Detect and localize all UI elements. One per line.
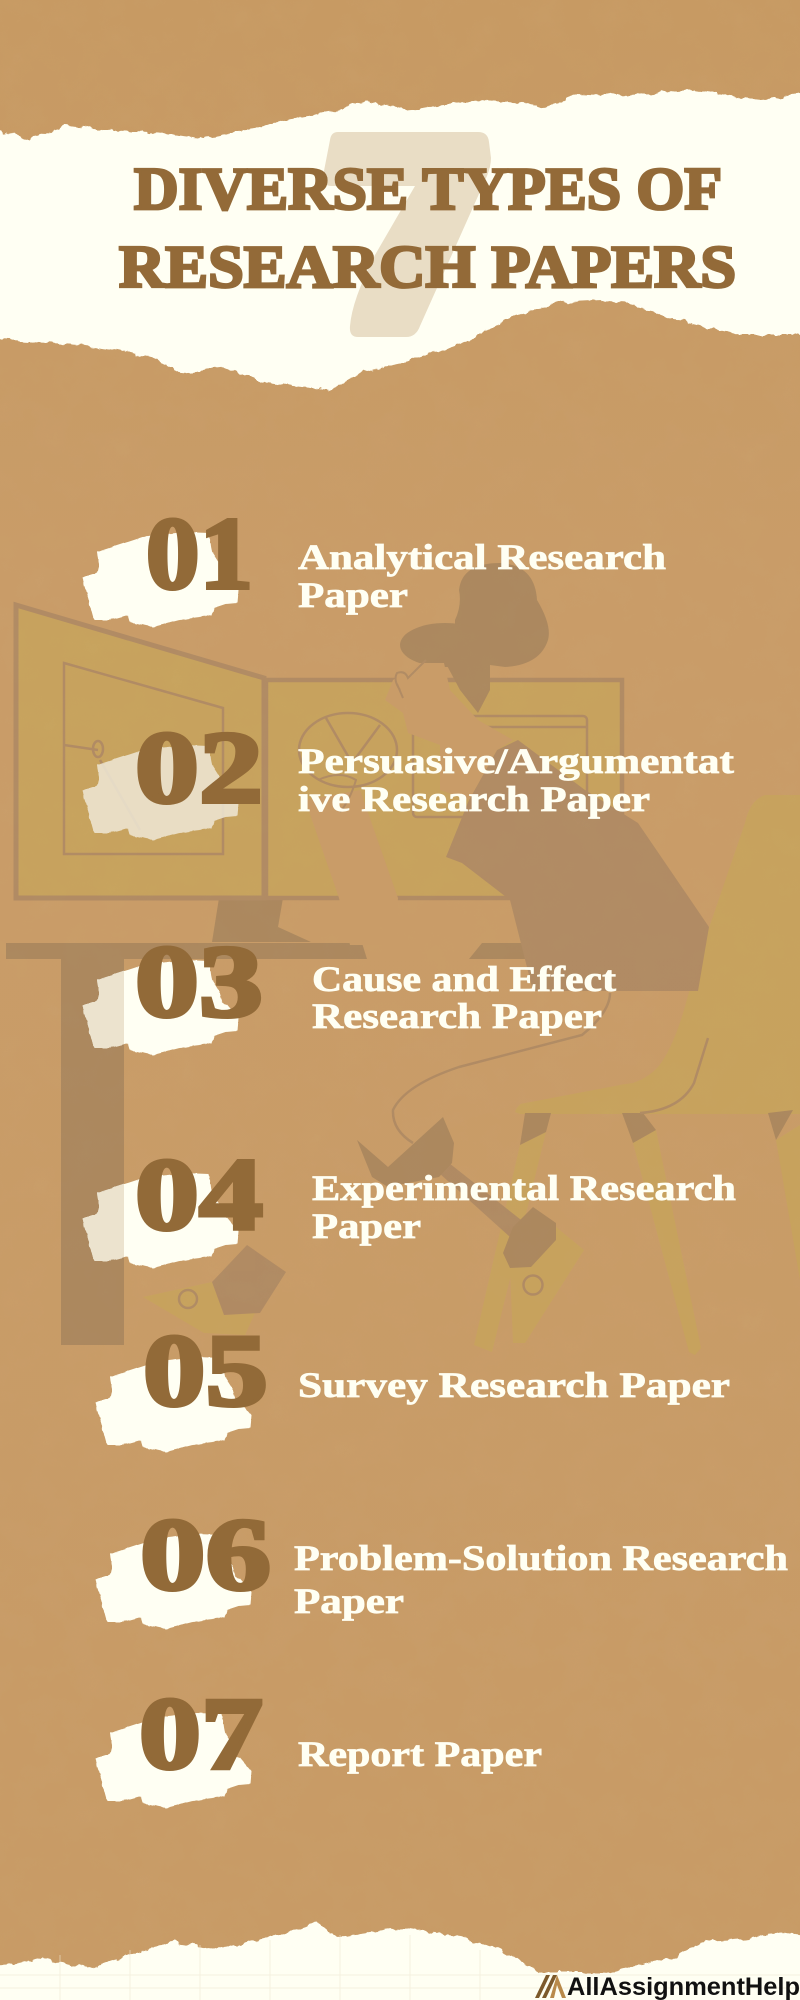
item 05: 05 [143,1314,268,1428]
item 04: Paper [312,1206,421,1246]
item 06 [140,1498,788,1621]
item 07 [139,1677,542,1791]
item 03: 03 [135,925,263,1039]
footer torn paper strip [0,1923,800,2000]
item 06: 06 [140,1498,271,1612]
title: DIVERSE TYPES OF [134,156,722,222]
big faded number 7 [323,132,491,337]
thigh [310,990,660,1185]
icon: logo slashes [535,1975,566,1998]
brush blob 07 [95,1713,251,1808]
item 07: 07 [139,1677,263,1791]
arm [305,790,398,945]
illustration: person working at desk with monitors [6,563,800,1355]
blob 03 tint where the desk leg overlaps [82,970,124,1048]
brush blob 02 seen through the illustration [82,745,238,840]
brush blob 04 [82,1173,238,1268]
item 07: Report Paper [298,1734,542,1774]
item 02: Persuasive/Argumentat [298,741,734,781]
right monitor panel [266,680,622,898]
item 03: Research Paper [312,996,602,1036]
item 02 [135,711,734,825]
item 03 [135,925,616,1039]
item 04: 04 [135,1138,263,1252]
desk top [6,943,530,959]
item 05 [143,1314,730,1428]
item 04: Experimental Research [312,1168,736,1208]
chair back and seat [515,795,800,1114]
title [119,156,736,300]
item 03: Cause and Effect [312,959,616,999]
item 06: Problem-Solution Research [294,1538,788,1578]
brush blob 05 [95,1357,251,1452]
left shoe [143,1245,286,1335]
item 04 [135,1138,736,1252]
shirt [446,740,709,991]
monitor stand [212,898,311,942]
item 06: Paper [294,1581,404,1621]
chair legs [474,1110,800,1355]
face and neck [385,663,513,800]
header torn paper strip [0,90,800,390]
item 02: ive Research Paper [298,779,650,819]
item 01 [146,497,666,615]
title: RESEARCH PAPERS [119,234,736,300]
hand lines [318,775,356,812]
item 01: Paper [298,575,408,615]
glasses [396,660,426,698]
item 02: 02 [135,711,263,825]
leg contour line [393,993,610,1143]
brush blob 06 [95,1534,251,1629]
chair contour line [640,1038,708,1113]
item 01: Analytical Research [298,537,666,577]
blob 04 tint where the desk leg overlaps [82,1184,124,1262]
brush blob 03 [82,960,238,1055]
item 01: 01 [146,497,253,611]
brush blob 01 [82,532,238,627]
left monitor panel [16,605,264,898]
hair [400,563,549,713]
right shoe [357,1117,584,1343]
item 05: Survey Research Paper [298,1365,730,1405]
desk leg [61,959,124,1345]
